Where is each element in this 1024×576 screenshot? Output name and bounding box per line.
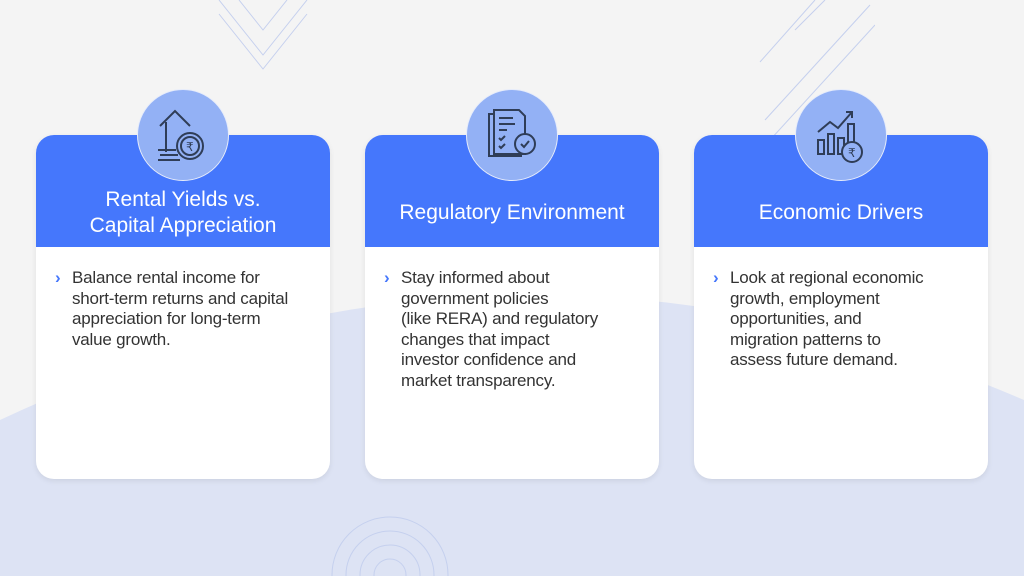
icon: house with rupee coin: ₹	[186, 140, 194, 154]
icon: growth chart with rupee	[795, 89, 887, 181]
text block: ›	[384, 268, 389, 287]
text block: ›	[713, 268, 718, 287]
text block: short-term returns and capital	[72, 288, 288, 308]
text block: investor confidence and	[401, 350, 576, 369]
text block: opportunities, and	[730, 309, 862, 328]
text block	[384, 268, 598, 390]
card: regulatory	[365, 135, 659, 479]
heading	[365, 135, 659, 247]
text block: government policies	[401, 288, 548, 308]
text block: (like RERA) and regulatory	[401, 309, 598, 328]
text block	[713, 268, 924, 369]
heading	[36, 135, 330, 247]
heading	[694, 135, 988, 247]
text block: Balance rental income for	[72, 268, 260, 287]
text block: ›	[55, 268, 60, 287]
decoration: chevrons top	[218, 0, 308, 70]
decoration: arcs bottom	[332, 516, 448, 576]
heading: Rental Yields vs.	[105, 188, 261, 211]
text block: changes that impact	[401, 330, 549, 348]
heading: Capital Appreciation	[90, 214, 276, 237]
text block: Stay informed about	[401, 268, 549, 287]
text block	[55, 268, 288, 348]
card: economic drivers	[694, 135, 988, 479]
icon: house with rupee coin	[137, 89, 229, 181]
text block: appreciation for long-term	[72, 309, 261, 328]
text block: migration patterns to	[730, 330, 881, 348]
text block: market transparency.	[401, 370, 555, 390]
card: rental yields	[36, 135, 330, 479]
heading: Regulatory Environment	[399, 201, 625, 224]
text block: Look at regional economic	[730, 268, 923, 287]
decoration: diagonal lines top right	[760, 0, 875, 135]
heading: Economic Drivers	[759, 201, 923, 224]
icon: growth chart with rupee: ₹	[848, 146, 856, 160]
text block: value growth.	[72, 330, 171, 348]
icon: document with check	[466, 89, 558, 181]
text block: growth, employment	[730, 288, 879, 308]
text block: assess future demand.	[730, 350, 898, 369]
